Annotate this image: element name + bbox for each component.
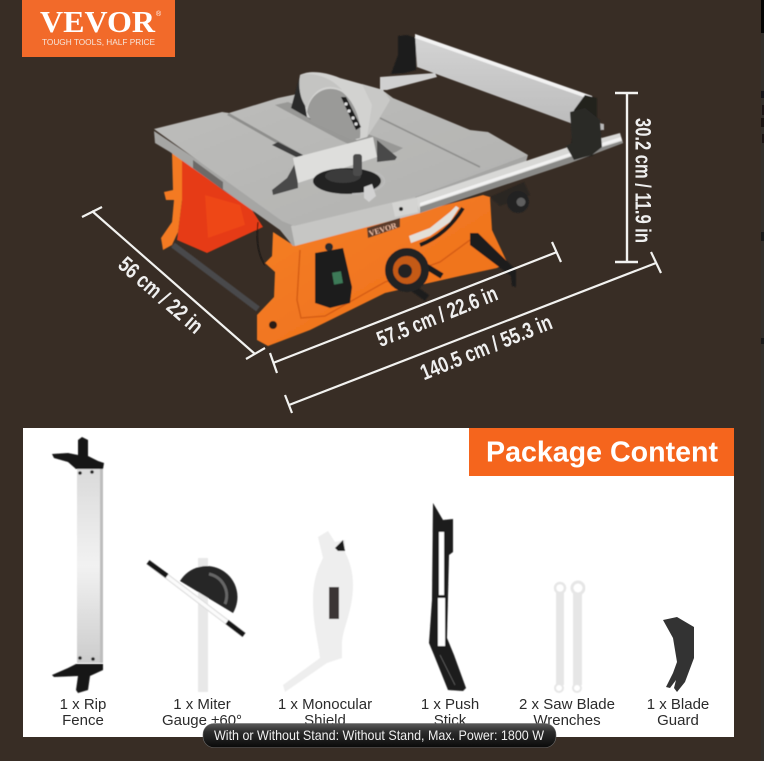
dimension: total width 140.5 cm / 55.3 in bbox=[285, 252, 661, 413]
heading: Package Content bbox=[469, 428, 734, 476]
item: monocular shield bbox=[283, 531, 353, 692]
caption pill: With or Without Stand: Without Stand, Max. Power: 1800 W bbox=[214, 727, 545, 743]
logo: VEVOR: TOUGH TOOLS, HALF PRICE bbox=[42, 37, 155, 47]
item: blade guard bbox=[663, 617, 694, 692]
item label: monocular shield: 1 x Monocular bbox=[278, 696, 372, 713]
item label: saw blade wrenches: Wrenches bbox=[533, 712, 601, 729]
heading: Package Content: Package Content bbox=[486, 436, 718, 468]
left leg bbox=[161, 153, 182, 250]
power cord bbox=[257, 222, 265, 265]
dimension: depth 56 cm / 22 in bbox=[82, 207, 265, 359]
lock knob bbox=[490, 182, 530, 213]
item label: blade guard: Guard bbox=[657, 712, 699, 729]
miter gauge on table bbox=[272, 137, 397, 202]
item label: push stick: Stick bbox=[434, 712, 467, 729]
item label: push stick: 1 x Push bbox=[421, 696, 479, 713]
saw blade and clear guard bbox=[291, 72, 390, 140]
item label: rip fence: Fence bbox=[62, 712, 104, 729]
throat plate bbox=[275, 102, 403, 158]
table saw product bbox=[154, 34, 623, 346]
dimension: total width 140.5 cm / 55.3 in: 140.5 cm / 55.3 in bbox=[416, 309, 556, 385]
rip fence on saw bbox=[380, 34, 604, 160]
dimension: depth 56 cm / 22 in: 56 cm / 22 in bbox=[113, 252, 208, 339]
rip fence clamp on rail bbox=[566, 108, 602, 160]
dimension: width 57.5 cm / 22.6 in bbox=[270, 242, 561, 373]
item label: miter gauge: 1 x Miter bbox=[173, 696, 231, 713]
item label: miter gauge: Gauge ±60° bbox=[162, 712, 242, 729]
side comb bracket bbox=[470, 233, 516, 287]
logo: VEVOR: VEVOR bbox=[40, 4, 156, 39]
item label: rip fence: 1 x Rip bbox=[60, 696, 106, 713]
dimension: height 30.2 cm / 11.9 in: 30.2 cm / 11.9 in bbox=[630, 118, 655, 243]
guide rail bbox=[392, 133, 623, 217]
right edge strip bbox=[761, 0, 764, 761]
panel: package content bbox=[23, 428, 734, 737]
logo: VEVOR bbox=[22, 0, 175, 57]
orange body bbox=[257, 195, 507, 346]
item: rip fence bbox=[52, 437, 104, 693]
tie rod bbox=[173, 245, 258, 309]
item label: saw blade wrenches: 2 x Saw Blade bbox=[519, 696, 615, 713]
VEVOR plate: VEVOR bbox=[368, 221, 398, 238]
table top bbox=[154, 85, 528, 246]
red transparent bin bbox=[177, 158, 263, 253]
bevel handwheel bbox=[389, 252, 442, 298]
bevel scale bbox=[409, 206, 463, 245]
item: saw blade wrenches bbox=[555, 582, 584, 692]
dimension: width 57.5 cm / 22.6 in: 57.5 cm / 22.6 in bbox=[373, 281, 501, 352]
item: push stick bbox=[429, 503, 466, 691]
power switch bbox=[315, 243, 352, 308]
item label: blade guard: 1 x Blade bbox=[647, 696, 709, 713]
caption pill bbox=[203, 724, 556, 748]
logo: VEVOR: ® bbox=[156, 10, 162, 18]
item label: monocular shield: Shield bbox=[304, 712, 346, 729]
item: miter gauge bbox=[148, 558, 244, 692]
